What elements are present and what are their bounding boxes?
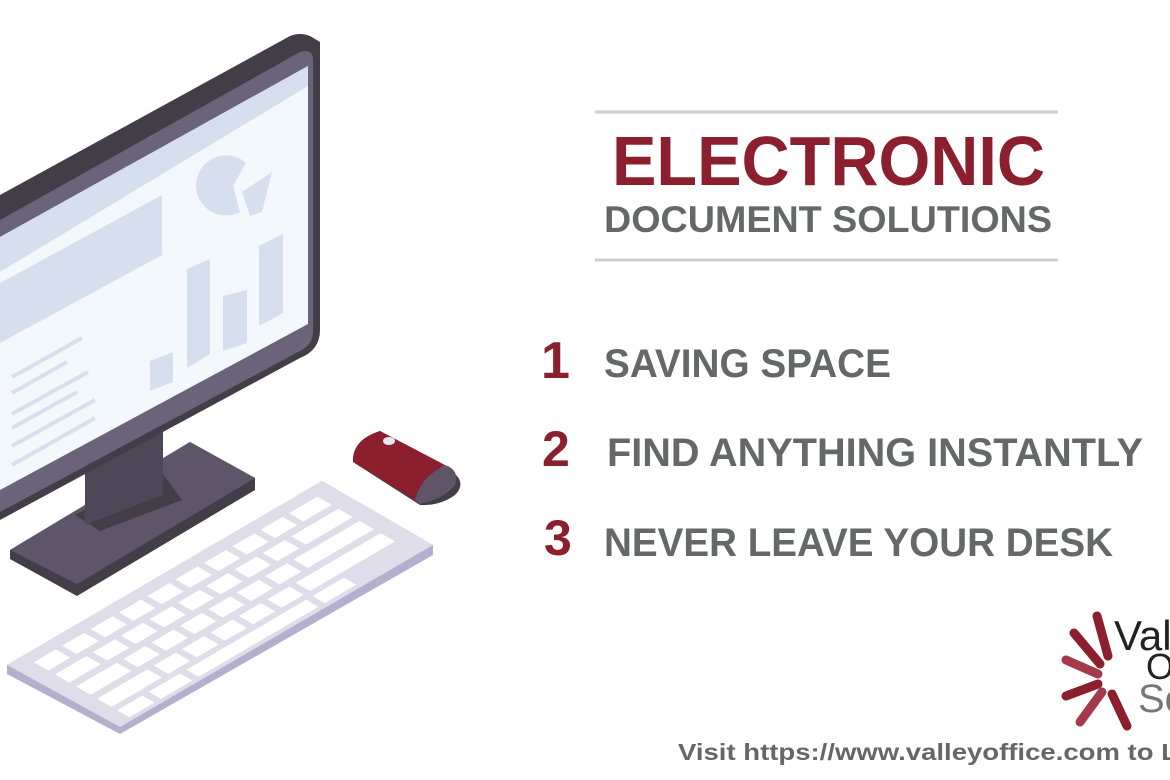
item 3	[544, 510, 1113, 566]
footer url: Visit https://www.valleyoffice.com to L	[678, 739, 1170, 765]
item 1	[541, 332, 891, 390]
item 2: 2	[542, 421, 570, 477]
item 2: FIND ANYTHING INSTANTLY	[607, 431, 1143, 475]
screen	[0, 66, 308, 490]
screen: pie chart	[196, 155, 272, 216]
item 3: 3	[544, 510, 572, 566]
subtitle: DOCUMENT SOLUTIONS	[604, 199, 1052, 240]
item 2	[542, 421, 1143, 477]
item 3: NEVER LEAVE YOUR DESK	[604, 521, 1113, 565]
list items	[541, 332, 1143, 566]
screen: bar chart	[150, 234, 283, 391]
heading block	[595, 112, 1058, 260]
screen: banner block	[0, 195, 162, 343]
keyboard	[7, 481, 433, 734]
illustration: computer	[0, 34, 460, 734]
logo wordmark	[1114, 612, 1170, 721]
screen: text lines	[12, 338, 95, 465]
monitor	[0, 34, 320, 520]
item 1: 1	[541, 332, 570, 390]
logo burst icon	[1066, 616, 1127, 726]
item 1: SAVING SPACE	[604, 342, 891, 386]
logo	[1066, 612, 1170, 726]
mouse	[353, 431, 460, 505]
monitor stand base	[10, 430, 255, 596]
title: ELECTRONIC: ELECTRONIC	[612, 122, 1045, 200]
